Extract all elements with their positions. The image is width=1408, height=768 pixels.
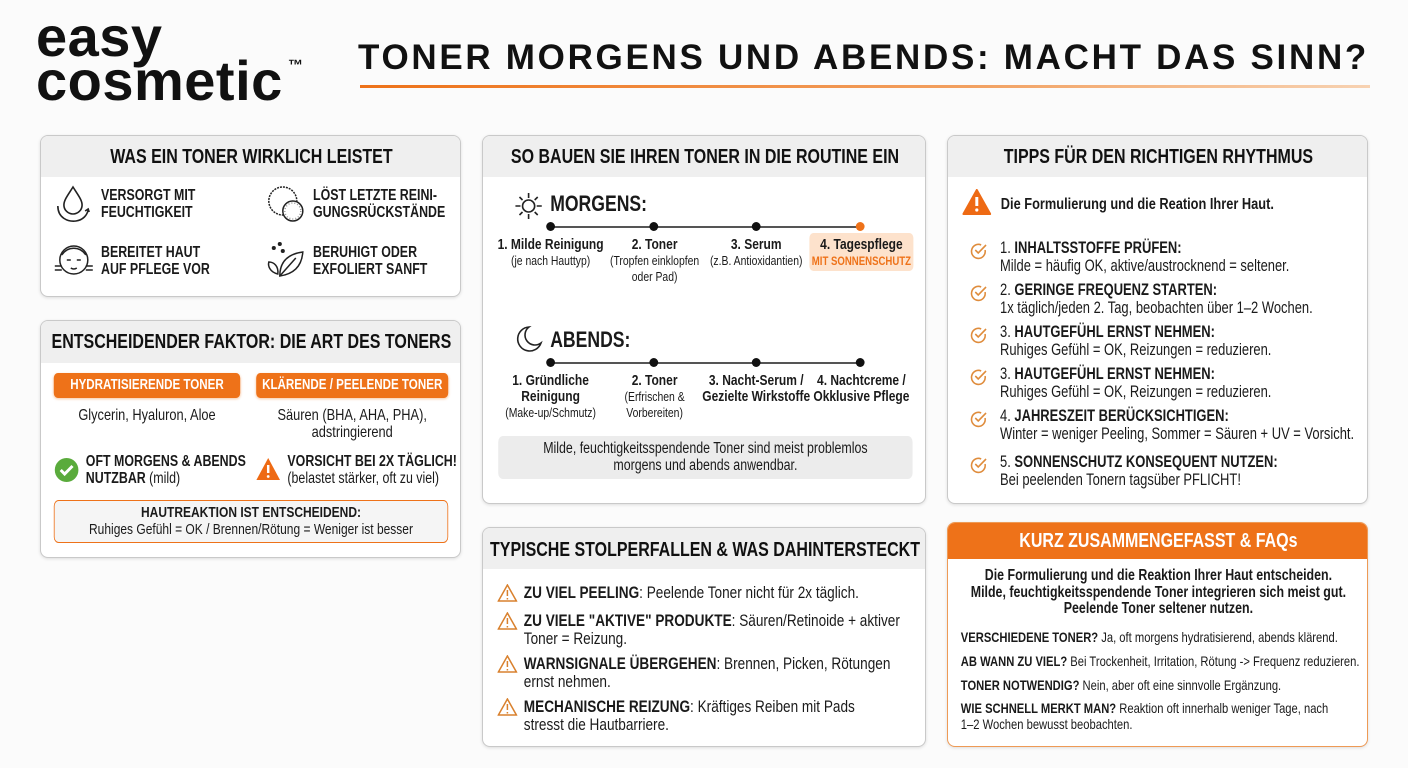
timeline: abends: Gezielte Wirkstoffe — [702, 388, 810, 405]
text: oft morgens — [86, 453, 246, 487]
panel: art des toners — [40, 320, 461, 558]
list: stolperfallen: ZU VIELE "AKTIVE" PRODUKTE: Säuren/Retinoide + aktiver — [524, 611, 900, 630]
heading: TYPISCHE STOLPERFALLEN & WAS DAHINTERSTECKT — [490, 539, 920, 561]
timeline: morgens: (je nach Hauttyp) — [511, 253, 590, 268]
pill: hydratisierend — [54, 373, 240, 398]
note box: morgens und abends anwendbar. — [613, 456, 797, 474]
pill: klärend — [256, 373, 448, 398]
faq list: 1–2 Wochen bewusst beobachten. — [961, 716, 1132, 732]
faq list: WIE SCHNELL MERKT MAN? Reaktion oft innerhalb weniger Tage, nach — [961, 700, 1328, 716]
summary text: Milde, feuchtigkeitsspendende Toner integrieren sich meist gut. — [971, 584, 1346, 600]
panel: faqs — [947, 522, 1368, 747]
text: beruhigt — [313, 244, 428, 278]
icon: moon — [516, 326, 543, 352]
callout: warning — [962, 189, 1274, 215]
timeline: morgens: (z.B. Antioxidantien) — [710, 253, 802, 268]
pill: klärend: KLÄRENDE / PEELENDE TONER — [262, 377, 442, 393]
text: reinigung — [313, 186, 445, 221]
callout: hautreaktion: Ruhiges Gefühl = OK / Brennen/Rötung = Weniger ist besser — [89, 521, 413, 538]
heading — [41, 136, 462, 177]
icon: water drop — [57, 186, 90, 222]
list: stolperfallen — [497, 583, 900, 734]
list: tipps: 2. GERINGE FREQUENZ STARTEN: — [1000, 281, 1217, 299]
list: tipps: 1. INHALTSSTOFFE PRÜFEN: — [1000, 239, 1182, 257]
timeline: morgens: 2. Toner — [632, 236, 677, 253]
timeline: abends: 4. Nachtcreme / — [817, 372, 906, 389]
text: vorsicht: VORSICHT BEI 2X TÄGLICH! — [287, 453, 457, 470]
timeline: abends: 3. Nacht-Serum / — [709, 372, 804, 389]
text: oft morgens: OFT MORGENS & ABENDS — [86, 453, 246, 470]
note box — [498, 436, 913, 479]
timeline: abends: Reinigung — [521, 388, 580, 405]
summary text: Peelende Toner seltener nutzen. — [1064, 600, 1253, 617]
pill: hydratisierend: HYDRATISIERENDE TONER — [70, 377, 224, 393]
timeline: abends: Okklusive Pflege — [813, 388, 909, 405]
list: tipps — [970, 238, 1354, 488]
timeline: abends: Vorbereiten) — [626, 405, 683, 420]
list: stolperfallen: ZU VIEL PEELING: Peelende Toner nicht für 2x täglich. — [524, 583, 859, 602]
text: feuchtigkeit: VERSORGT MIT — [101, 187, 195, 204]
timeline: morgens: 4. Tagespflege — [820, 236, 903, 253]
text: beruhigt: EXFOLIERT SANFT — [313, 261, 427, 278]
list: stolperfallen: stresst die Hautbarriere. — [524, 715, 669, 734]
list: tipps: Winter = weniger Peeling, Sommer = Säuren + UV = Vorsicht. — [1000, 424, 1354, 442]
text: pflege: AUF PFLEGE VOR — [101, 261, 210, 278]
list: tipps: 4. JAHRESZEIT BERÜCKSICHTIGEN: — [1000, 407, 1229, 425]
text: feuchtigkeit — [101, 187, 196, 221]
heading: morgens: MORGENS: — [550, 191, 647, 216]
faq list: AB WANN ZU VIEL? Bei Trockenheit, Irritation, Rötung -> Frequenz reduzieren. — [961, 653, 1359, 669]
callout: warning: Die Formulierung und die Reation Ihrer Haut. — [1001, 196, 1274, 213]
faq list: TONER NOTWENDIG? Nein, aber oft eine sinnvolle Ergänzung. — [961, 677, 1281, 693]
timeline: abends: (Make-up/Schmutz) — [505, 405, 596, 420]
heading: ENTSCHEIDENDER FAKTOR: DIE ART DES TONERS — [52, 331, 451, 353]
timeline: morgens: oder Pad) — [632, 269, 677, 284]
heading: KURZ ZUSAMMENGEFASST & FAQs — [1019, 530, 1298, 552]
faq list: VERSCHIEDENE TONER? Ja, oft morgens hydratisierend, abends klärend. — [961, 629, 1338, 645]
heading — [483, 528, 927, 569]
list: tipps: Ruhiges Gefühl = OK, Reizungen = reduzieren. — [1000, 382, 1271, 400]
heading: TIPPS FÜR DEN RICHTIGEN RHYTHMUS — [1004, 146, 1313, 168]
text: reinigung: LÖST LETZTE REINI- — [313, 187, 437, 204]
list: tipps: Bei peelenden Tonern tagsüber PFLICHT! — [1000, 470, 1241, 488]
text: vorsicht: (belastet stärker, oft zu viel) — [287, 470, 439, 487]
list: stolperfallen: WARNSIGNALE ÜBERGEHEN: Brennen, Picken, Rötungen — [524, 654, 890, 673]
text: beruhigt: BERUHIGT ODER — [313, 244, 417, 261]
panel: was ein toner leistet — [40, 135, 461, 297]
logo — [36, 5, 303, 112]
logo: ™ — [288, 57, 303, 74]
timeline: morgens — [498, 222, 914, 284]
list: stolperfallen: ernst nehmen. — [524, 672, 611, 691]
text: säuren: Säuren (BHA, AHA, PHA), — [278, 407, 427, 424]
list: tipps: 3. HAUTGEFÜHL ERNST NEHMEN: — [1000, 323, 1215, 341]
text: pflege — [101, 244, 210, 278]
summary text: Die Formulierung und die Reaktion Ihrer Haut entscheiden. — [985, 567, 1332, 584]
text: glycerin: Glycerin, Hyaluron, Aloe — [78, 407, 216, 424]
logo: easy — [36, 5, 163, 68]
text: pflege: BEREITET HAUT — [101, 244, 200, 261]
logo: cosmetic — [36, 49, 283, 112]
timeline: abends: 1. Gründliche — [512, 372, 589, 389]
heading — [41, 321, 462, 363]
heading: SO BAUEN SIE IHREN TONER IN DIE ROUTINE EIN — [511, 146, 899, 168]
text: oft morgens: NUTZBAR (mild) — [86, 470, 180, 487]
icon: face — [54, 245, 93, 275]
text: reinigung: GUNGSRÜCKSTÄNDE — [313, 204, 445, 221]
panel: tipps — [947, 135, 1368, 504]
timeline: morgens: 1. Milde Reinigung — [498, 236, 604, 253]
text: säuren: adstringierend — [312, 424, 393, 441]
list: tipps: 5. SONNENSCHUTZ KONSEQUENT NUTZEN: — [1000, 453, 1278, 471]
icon: leaf — [268, 242, 304, 277]
heading — [483, 136, 927, 177]
icon: warning — [256, 458, 280, 480]
text: feuchtigkeit: FEUCHTIGKEIT — [101, 204, 193, 221]
list: tipps: Milde = häufig OK, aktive/austrocknend = seltener. — [1000, 256, 1289, 274]
note box: Milde, feuchtigkeitsspendende Toner sind meist problemlos — [543, 440, 868, 457]
faq list — [960, 629, 1359, 732]
heading — [948, 523, 1369, 559]
list: tipps: 1x täglich/jeden 2. Tag, beobachten über 1–2 Wochen. — [1000, 298, 1313, 316]
timeline: morgens: 3. Serum — [731, 236, 782, 253]
heading: WAS EIN TONER WIRKLICH LEISTET — [110, 146, 393, 168]
callout: hautreaktion — [54, 500, 448, 543]
icon: check — [54, 458, 78, 482]
text: vorsicht — [287, 452, 457, 487]
icon: cotton pads — [268, 186, 304, 222]
timeline: abends — [505, 358, 909, 420]
timeline: morgens: (Tropfen einklopfen — [610, 253, 699, 268]
title: TONER MORGENS UND ABENDS: MACHT DAS SINN? — [358, 38, 1369, 77]
icon: sun — [515, 193, 542, 219]
summary text — [971, 567, 1346, 617]
text: säuren — [278, 407, 427, 441]
list: stolperfallen: Toner = Reizung. — [524, 629, 627, 648]
panel: stolperfallen — [482, 527, 926, 747]
heading — [948, 136, 1369, 177]
callout: hautreaktion: HAUTREAKTION IST ENTSCHEIDEND: — [141, 504, 361, 521]
list: tipps: 3. HAUTGEFÜHL ERNST NEHMEN: — [1000, 365, 1215, 383]
panel: routine — [482, 135, 926, 504]
list: tipps: Ruhiges Gefühl = OK, Reizungen = reduzieren. — [1000, 340, 1271, 358]
timeline: abends: (Erfrischen & — [625, 389, 685, 404]
timeline: abends: 2. Toner — [632, 372, 677, 389]
timeline: morgens: MIT SONNENSCHUTZ — [812, 254, 911, 268]
list: stolperfallen: MECHANISCHE REIZUNG: Kräftiges Reiben mit Pads — [524, 697, 855, 716]
heading: abends: ABENDS: — [550, 327, 630, 352]
